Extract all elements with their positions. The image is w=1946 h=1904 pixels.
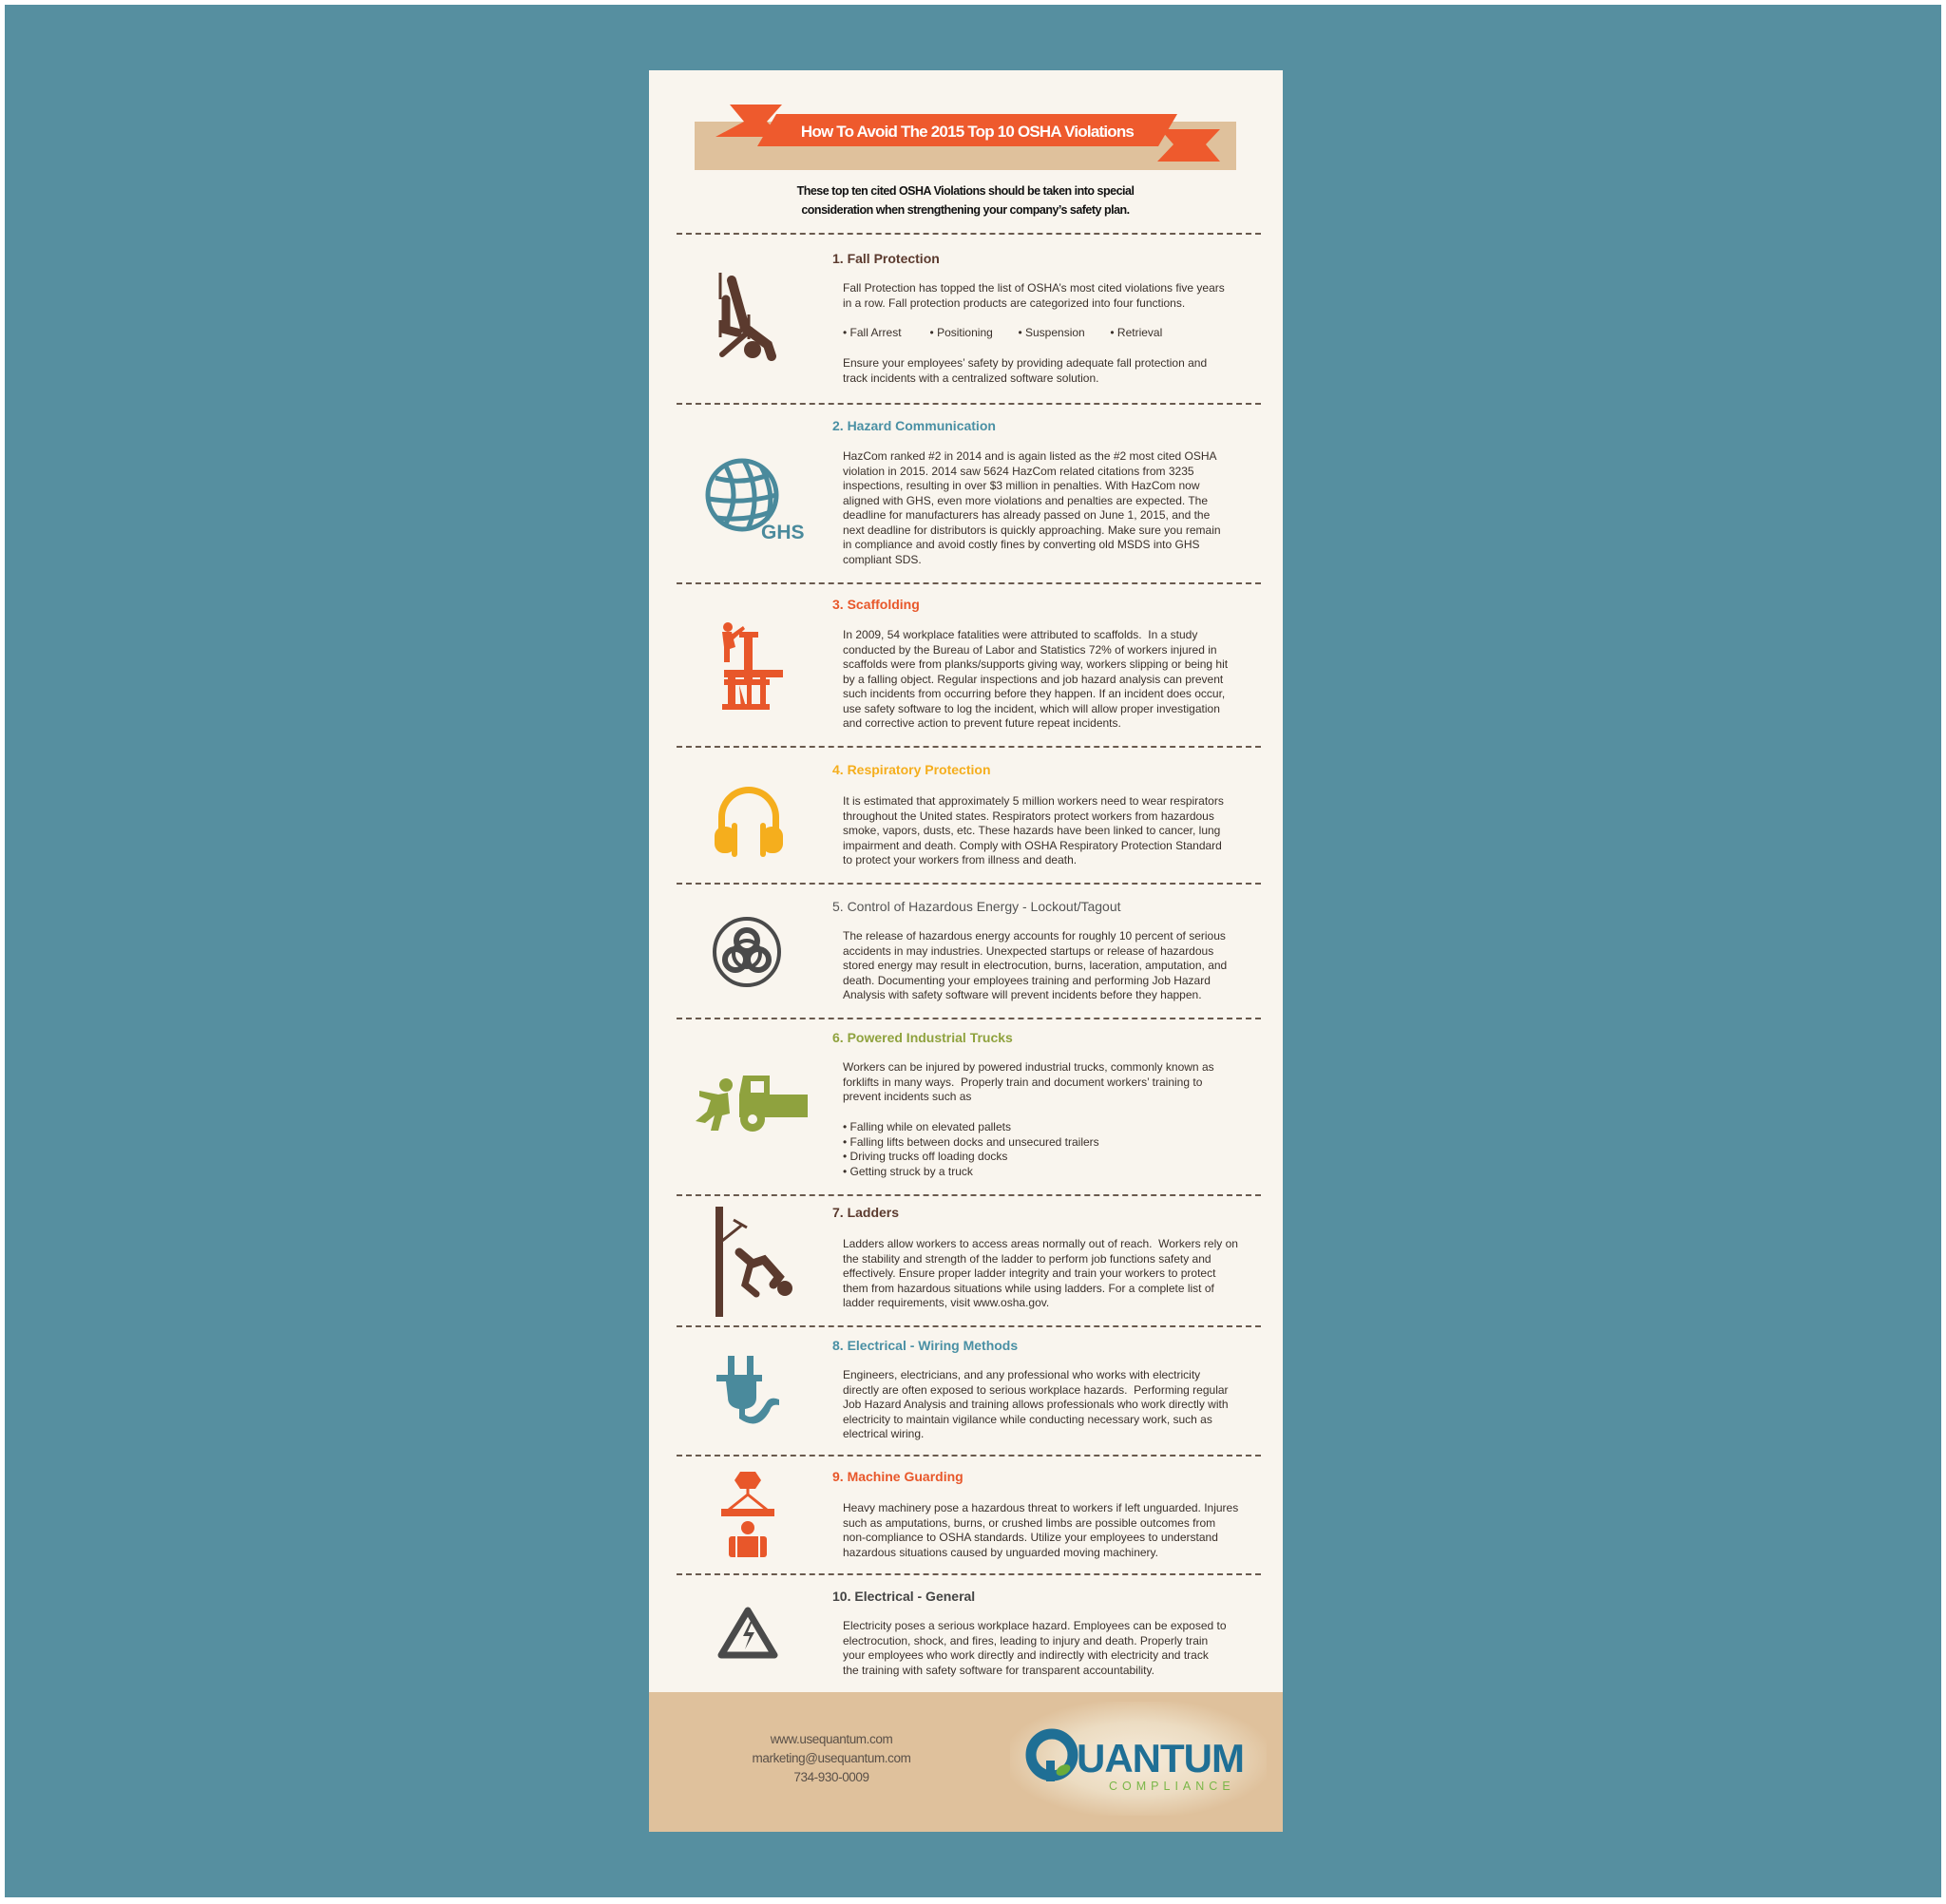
text: hazardous energy: stored energy may result in electrocution, burns, laceration, amputation, and [843,959,1227,972]
text: hazardous energy: Analysis with safety software will prevent incidents before they happen. [843,988,1202,1001]
text: hazardous energy: The release of hazardous energy accounts for roughly 10 percent of serious [843,929,1226,942]
text: fall protection ensure: Ensure your employees’ safety by providing adequate fall protection and [843,356,1207,370]
bullets: fall protection: • Fall Arrest • Positioning • Suspension • Retrieval [843,326,1162,339]
section 10 [718,1589,1227,1676]
text: respiratory protection: It is estimated that approximately 5 million workers need to wear respirators [843,794,1224,808]
text: scaffolding: and corrective action to prevent future repeat incidents. [843,716,1121,730]
text: hazard communication [843,449,1221,566]
panel: main card [649,70,1283,1832]
icon: suspended load [721,1472,774,1557]
text: hazard communication: aligned with GHS, even more violations and penalties are expected. The [843,494,1208,507]
text: fall protection ensure: track incidents with a centralized software solution. [843,371,1098,384]
text: hazardous energy [843,929,1227,1001]
text: fall protection: Fall Protection has topped the list of OSHA’s most cited violations five years [843,281,1225,295]
text: hazard communication: violation in 2015. 2014 saw 5624 HazCom related citations from 3235 [843,464,1194,477]
contact info: marketing@usequantum.com [753,1751,910,1765]
heading: wiring methods: 8. Electrical - Wiring Methods [832,1338,1018,1353]
section 4 [715,762,1224,866]
heading: hazardous energy: 5. Control of Hazardous Energy - Lockout/Tagout [832,899,1121,914]
text: ladders: ladder requirements, visit www.osha.gov. [843,1296,1049,1309]
section 8 [716,1338,1229,1440]
text: electrical general: Electricity poses a serious workplace hazard. Employees can be exposed to [843,1619,1227,1632]
text: hazardous energy: accidents in may industries. Unexpected startups or release of hazardous [843,944,1213,958]
heading: fall protection: 1. Fall Protection [832,251,940,266]
heading: electrical general: 10. Electrical - General [832,1589,975,1604]
contact info: 734-930-0009 [793,1770,869,1784]
text: ladders: them from hazardous situations while using ladders. For a complete list of [843,1281,1214,1294]
heading: respiratory protection: 4. Respiratory Protection [832,762,990,777]
text: wiring methods: Job Hazard Analysis and training allows professionals who work directly with [843,1398,1229,1411]
heading: hazard communication: 2. Hazard Communication [832,418,996,433]
text: hazard communication: deadline for manufacturers has already passed on June 1, 2015, and the [843,508,1210,522]
text: wiring methods: directly are often exposed to serious workplace hazards. Performing regular [843,1383,1229,1397]
logo: quantum compliance [1010,1702,1267,1816]
title banner: How To Avoid The 2015 Top 10 OSHA Violations [801,123,1134,141]
text: electrical general: electrocution, shock, and fires, leading to injury and death. Properly train [843,1634,1208,1647]
icon: scaffold [722,622,783,710]
text: ladders: Ladders allow workers to access areas normally out of reach. Workers rely on [843,1237,1238,1250]
text: wiring methods [843,1368,1229,1440]
text: ladders [843,1237,1238,1309]
icon: forklift [696,1076,808,1132]
bullets: trucks: • Getting struck by a truck [843,1165,973,1178]
icon: GHS globe [705,458,805,541]
text: hazard communication: in compliance and avoid costly fines by converting old MSDS into GHS [843,538,1200,551]
text: scaffolding: such incidents from occurring before they happen. If an incident does occur, [843,687,1225,700]
icon: biohazard [713,917,781,987]
text: powered industrial trucks: forklifts in many ways. Properly train and document workers’ training to [843,1076,1202,1089]
text: fall protection ensure [843,356,1207,384]
footer [649,1692,1283,1832]
text: hazard communication: next deadline for distributors is quickly approaching. Make sure you remain [843,523,1221,536]
section 7 [715,1205,1238,1317]
text: electrical general [843,1619,1227,1676]
subtitle: consideration when strengthening your company’s safety plan. [801,203,1130,217]
text: scaffolding [843,628,1228,730]
text: scaffolding: scaffolds were from planks/supports giving way, workers slipping or being hit [843,657,1228,671]
text: electrical general: your employees who work directly and indirectly with electricity and track [843,1648,1209,1662]
section 6 [696,1030,1214,1178]
heading: scaffolding: 3. Scaffolding [832,597,920,612]
text: respiratory protection: throughout the United states. Respirators protect workers from hazardous [843,809,1214,823]
subtitle: These top ten cited OSHA Violations should be taken into special [797,184,1134,198]
text: machine guarding [843,1501,1238,1558]
logo: quantum compliance: UANTUM [1077,1736,1244,1780]
text: machine guarding: non-compliance to OSHA standards. Utilize your employees to understand [843,1531,1218,1544]
heading: machine guarding: 9. Machine Guarding [832,1469,963,1484]
text: wiring methods: electrical wiring. [843,1427,924,1440]
text: hazardous energy: death. Documenting your employees training and performing Job Hazard [843,973,1211,986]
bullets: trucks: • Driving trucks off loading docks [843,1150,1007,1163]
text: respiratory protection: smoke, vapors, dusts, etc. These hazards have been linked to cancer, lung [843,824,1220,837]
section 3 [722,597,1228,730]
icon: plug [716,1356,779,1423]
text: electrical general: the training with safety software for transparent accountability. [843,1663,1154,1676]
section 1 [718,251,1225,384]
text: respiratory protection: to protect your workers from illness and death. [843,853,1077,866]
logo: quantum compliance: COMPLIANCE [1109,1780,1235,1793]
text: machine guarding: hazardous situations caused by unguarded moving machinery. [843,1545,1158,1558]
section 2 [705,418,1221,566]
text: scaffolding: by a falling object. Regular inspections and job hazard analysis can prevent [843,673,1223,686]
text: hazard communication: HazCom ranked #2 in 2014 and is again listed as the #2 most cited OSHA [843,449,1217,463]
section 9 [721,1469,1238,1558]
text: scaffolding: In 2009, 54 workplace fatalities were attributed to scaffolds. In a study [843,628,1197,641]
contact info [753,1732,910,1784]
text: powered industrial trucks: Workers can be injured by powered industrial trucks, commonly known as [843,1060,1214,1074]
text: hazard communication: inspections, resulting in over $3 million in penalties. With HazCom now [843,479,1200,492]
contact info: www.usequantum.com [771,1732,892,1746]
text: ladders: effectively. Ensure proper ladder integrity and train your workers to protect [843,1266,1215,1280]
heading: ladders: 7. Ladders [832,1205,899,1220]
bullets: trucks: • Falling lifts between docks and unsecured trailers [843,1134,1099,1148]
heading: powered industrial trucks: 6. Powered Industrial Trucks [832,1030,1013,1045]
text: ladders: the stability and strength of the ladder to perform job functions safety and [843,1252,1211,1266]
section 5 [713,899,1227,1001]
icon: headphones [715,787,783,857]
text: powered industrial trucks [843,1060,1214,1103]
text: machine guarding: Heavy machinery pose a hazardous threat to workers if left unguarded. Injures [843,1501,1238,1514]
text: scaffolding: use safety software to log the incident, which will allow proper investigation [843,701,1220,714]
text: fall protection: in a row. Fall protection products are categorized into four functions. [843,296,1185,310]
text: fall protection [843,281,1225,310]
icon: electrical warning triangle [718,1608,777,1659]
bullets: trucks [843,1120,1099,1178]
text: wiring methods: Engineers, electricians, and any professional who works with electricity [843,1368,1200,1381]
text: hazard communication: compliant SDS. [843,553,922,566]
text: respiratory protection [843,794,1224,866]
text: wiring methods: electricity to maintain vigilance while conducting necessary work, such as [843,1412,1212,1425]
title banner [695,105,1236,170]
subtitle [796,184,1135,217]
text: respiratory protection: impairment and death. Comply with OSHA Respiratory Protection Standard [843,838,1222,851]
text: machine guarding: such as amputations, burns, or crushed limbs are possible outcomes from [843,1516,1215,1530]
text: scaffolding: conducted by the Bureau of Labor and Statistics 72% of workers injured in [843,642,1217,656]
text: powered industrial trucks: prevent incidents such as [843,1090,971,1103]
bullets: trucks: • Falling while on elevated pallets [843,1120,1011,1133]
icon: ladder fall [715,1207,792,1317]
icon: falling person [718,273,776,361]
